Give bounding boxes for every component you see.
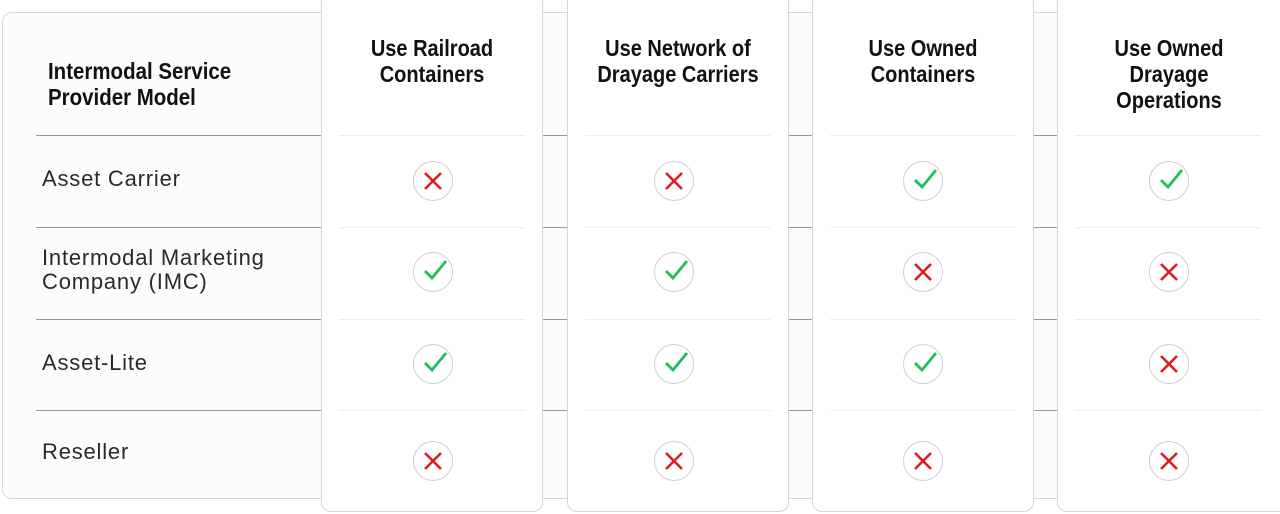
panel: Use Owned Drayage Operations [1057, 0, 1280, 512]
panel: Use Owned Containers: Use Owned [869, 35, 977, 61]
panel: Use Owned Containers: Containers [871, 61, 975, 87]
row label: IMC: Company (IMC) [42, 269, 208, 294]
row label: IMC: Intermodal Marketing [42, 245, 265, 270]
panel: Use Railroad Containers: Containers [380, 61, 484, 87]
panel: Use Owned Drayage Operations: Use Owned [1115, 35, 1223, 61]
row label: Reseller: Reseller [42, 439, 129, 464]
panel: Use Network of Drayage Carriers: Use Network of [605, 35, 751, 61]
panel: Use Network of Drayage Carriers [567, 0, 789, 512]
panel: Use Railroad Containers: Use Railroad [371, 35, 493, 61]
panel: Use Network of Drayage Carriers: Drayage Carriers [597, 61, 759, 87]
heading: model: Intermodal Service [48, 58, 231, 84]
row label: Asset-Lite: Asset-Lite [42, 350, 148, 375]
panel: Use Railroad Containers [321, 0, 543, 512]
panel: Use Owned Drayage Operations: Operations [1116, 87, 1222, 113]
heading: model: Provider Model [48, 84, 196, 110]
row label: Asset Carrier: Asset Carrier [42, 166, 181, 191]
panel: Use Owned Drayage Operations: Drayage [1130, 61, 1208, 87]
heading: model [48, 58, 231, 110]
row label: IMC [42, 245, 265, 294]
panel: Use Owned Containers [812, 0, 1034, 512]
